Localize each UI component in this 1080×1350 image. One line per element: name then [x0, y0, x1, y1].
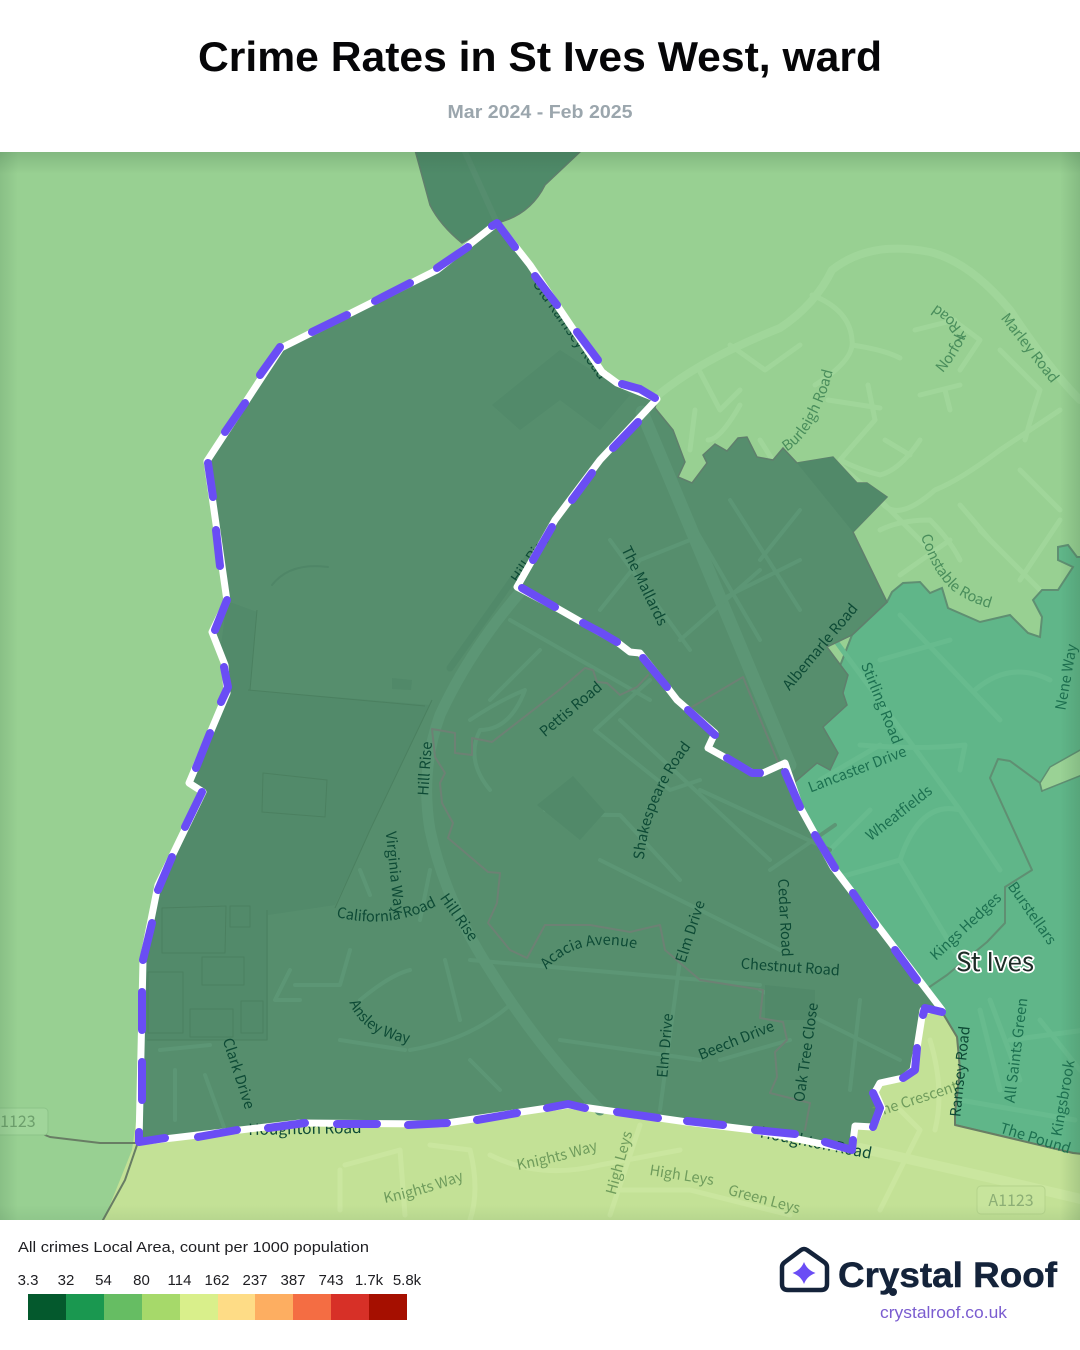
roads in mid green area [835, 642, 846, 657]
roads in north-east neighbourhood [657, 249, 1080, 590]
fields and building outlines [147, 610, 432, 1040]
label: Beech Drive: Beech Drive [695, 1015, 777, 1065]
local boundary lines in mid green area [928, 759, 1042, 988]
label: Constable Road: Constable Road [922, 534, 992, 608]
roads inside the ward [594, 823, 837, 1116]
label: Elm Drive north: Elm Drive [670, 897, 710, 965]
label: Kingsbrook: Kingsbrook [1046, 1058, 1080, 1138]
label: The Pound: The Pound [998, 1117, 1074, 1158]
legend tick values: 162 [204, 1272, 230, 1289]
label: Hill Rise: Hill Rise [412, 741, 437, 796]
label: Houghton Road west: Houghton Road [248, 1116, 362, 1140]
label: Elm Drive south: Elm Drive [651, 1013, 678, 1079]
label: Ansley Way: Ansley Way [349, 1001, 410, 1046]
label: High Leys vertical: High Leys [600, 1128, 637, 1197]
wordmark key-shaped descender [889, 1288, 897, 1296]
label: Houghton Road east: Houghton Road [758, 1121, 874, 1164]
region: St Ives West ward dark fill [139, 223, 942, 1150]
title: Crime Rates in St Ives West, ward [198, 33, 882, 80]
legend tick values: 54 [95, 1272, 112, 1289]
label: Hill Rise south: Hill Rise [435, 889, 484, 945]
label: Chestnut Road: Chestnut Road [740, 953, 841, 980]
label: Burleigh Road: Burleigh Road [782, 369, 832, 451]
label: Green Leys: Green Leys [726, 1179, 803, 1218]
roads in yellow-green area [340, 1040, 1080, 1220]
label: Shakespeare Road: Shakespeare Road [634, 740, 690, 859]
label: Ramsey Road: Ramsey Road [944, 1025, 975, 1118]
legend tick values: 80 [133, 1272, 150, 1289]
legend tick values: 3.3 [18, 1272, 38, 1289]
internal boundary lines inside ward [432, 668, 810, 1130]
label: Lancaster Drive: Lancaster Drive [805, 740, 909, 797]
label: The Crescent: The Crescent [870, 1075, 961, 1122]
label: Marley Road: Marley Road [996, 308, 1064, 387]
wordmark: Crystal Roof [838, 1256, 1057, 1295]
pond outline [286, 566, 323, 572]
legend tick values: 5.8k [393, 1272, 422, 1289]
label: High Leys: High Leys [648, 1159, 716, 1190]
legend title: All crimes Local Area, count per 1000 population [18, 1239, 369, 1256]
legend colour scale [28, 1294, 407, 1320]
map panel [0, 152, 1080, 1220]
legend tick values: 1.7k [355, 1272, 384, 1289]
label: Acacia Avenue: Acacia Avenue [542, 935, 636, 970]
subtitle: date range: Mar 2024 - Feb 2025 [448, 101, 632, 122]
map edge vignette [0, 152, 1080, 1220]
boundary: purple dashes [139, 223, 942, 1150]
label: California Road: California Road [338, 896, 436, 922]
label: Oak Tree Close: Oak Tree Close [788, 1001, 823, 1103]
legend tick values: 387 [280, 1272, 306, 1289]
label: Albemarle Road: Albemarle Road [777, 599, 862, 694]
website link: crystalroof.co.uk [880, 1304, 1008, 1322]
road through north wedge [465, 152, 497, 223]
label: Pettis Road: Pettis Road [535, 676, 606, 741]
label: Wheatfields: Wheatfields [861, 780, 937, 845]
region: mid green area of St Ives [795, 545, 1080, 1154]
legend tick values: 114 [168, 1272, 191, 1289]
legend tick values: 237 [242, 1272, 268, 1289]
legend tick values: 743 [318, 1272, 344, 1289]
road badge: A1123 east: A1123 [988, 1187, 1034, 1211]
label: Kings Hedges: Kings Hedges [925, 887, 1006, 965]
legend [18, 1239, 422, 1320]
label: Norfolk Road: Norfolk Road [930, 305, 966, 372]
label: All Saints Green: All Saints Green [999, 997, 1032, 1104]
boundary: white casing [139, 223, 942, 1150]
label: The Mallards: The Mallards [617, 542, 673, 629]
label: Virginia Way: Virginia Way [381, 830, 410, 915]
legend tick values: 32 [58, 1272, 74, 1289]
label: Cedar Road: Cedar Road [773, 878, 798, 957]
label: Knights Way east: Knights Way [517, 1142, 596, 1170]
icon: house with star [782, 1249, 827, 1290]
label: Burstellars: Burstellars [1003, 877, 1062, 949]
logo: Crystal Roof [782, 1249, 1057, 1322]
ward boundary outline [139, 223, 942, 1150]
road badge: A1123 east [977, 1186, 1045, 1214]
label: Stirling Road: Stirling Road [856, 659, 908, 747]
south-west boundary lines [0, 1012, 1080, 1220]
darker corner patch of neighbouring segment [797, 457, 887, 532]
place label: St Ives: St Ives [956, 942, 1034, 979]
label: Old Ramsey Road: Old Ramsey Road [528, 274, 613, 383]
region: dark wedge north of ward [415, 150, 582, 243]
legend tick values [18, 1272, 422, 1289]
pocket: light green lower-crime patch [1040, 749, 1080, 791]
sports field patches [543, 808, 815, 1020]
region: neighbouring dark ward segment [517, 399, 887, 782]
rail corridor [450, 555, 530, 668]
label: Knights Way west: Knights Way [384, 1172, 462, 1203]
label: Hill Rise north: Hill Rise [505, 531, 554, 587]
road badge: A1123 west [0, 1108, 48, 1135]
region: yellow-green area south of ward [103, 1000, 1080, 1222]
label group: street names [190, 248, 1080, 1214]
darker field patches inside ward [130, 350, 630, 1040]
map area: base light green [0, 152, 1080, 1220]
label: Clark Drive: Clark Drive [218, 1035, 261, 1112]
